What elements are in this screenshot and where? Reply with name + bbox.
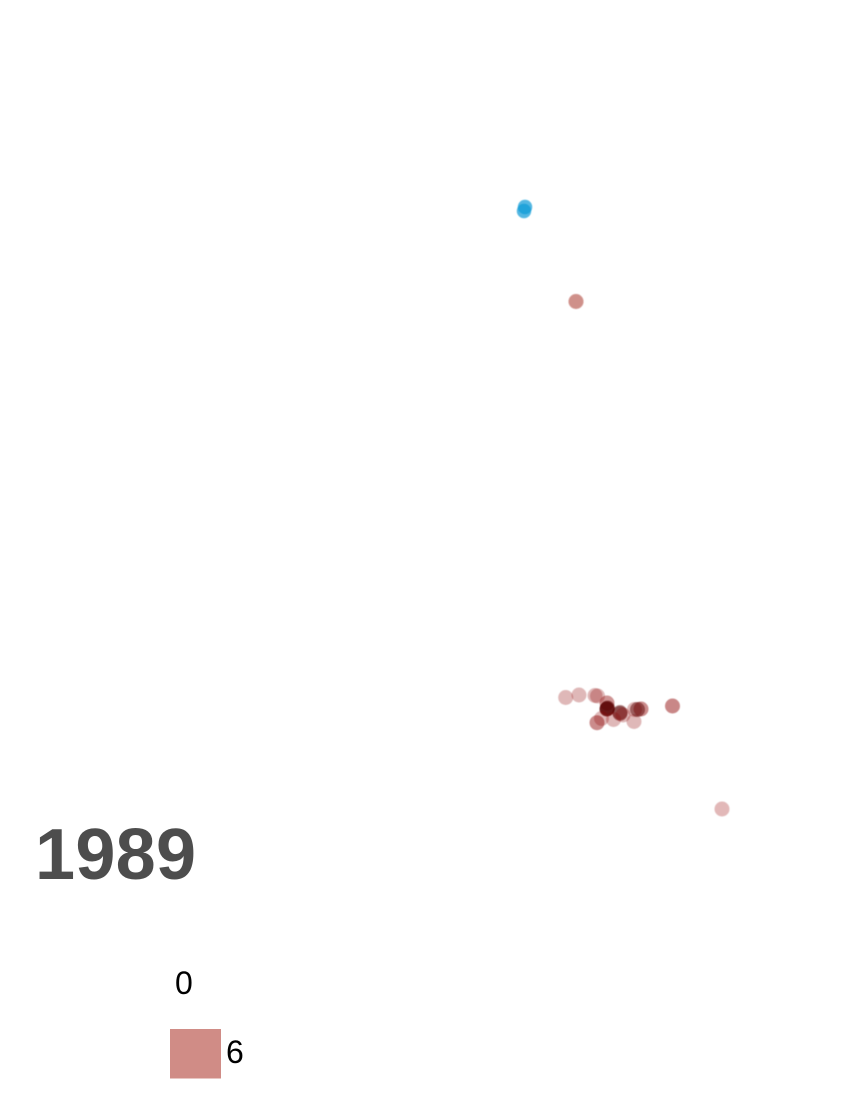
year label: 1989: [35, 815, 196, 895]
map point: northern red dot: [568, 294, 584, 309]
map points: blue cluster: [517, 200, 532, 218]
legend label: 6: 6: [226, 1034, 244, 1070]
legend label: 0: 0: [175, 965, 193, 1001]
legend swatch: [170, 1029, 221, 1078]
map points: southern red cluster: [558, 688, 680, 730]
map point: far southeast dot: [714, 802, 730, 816]
legend: [170, 965, 244, 1078]
